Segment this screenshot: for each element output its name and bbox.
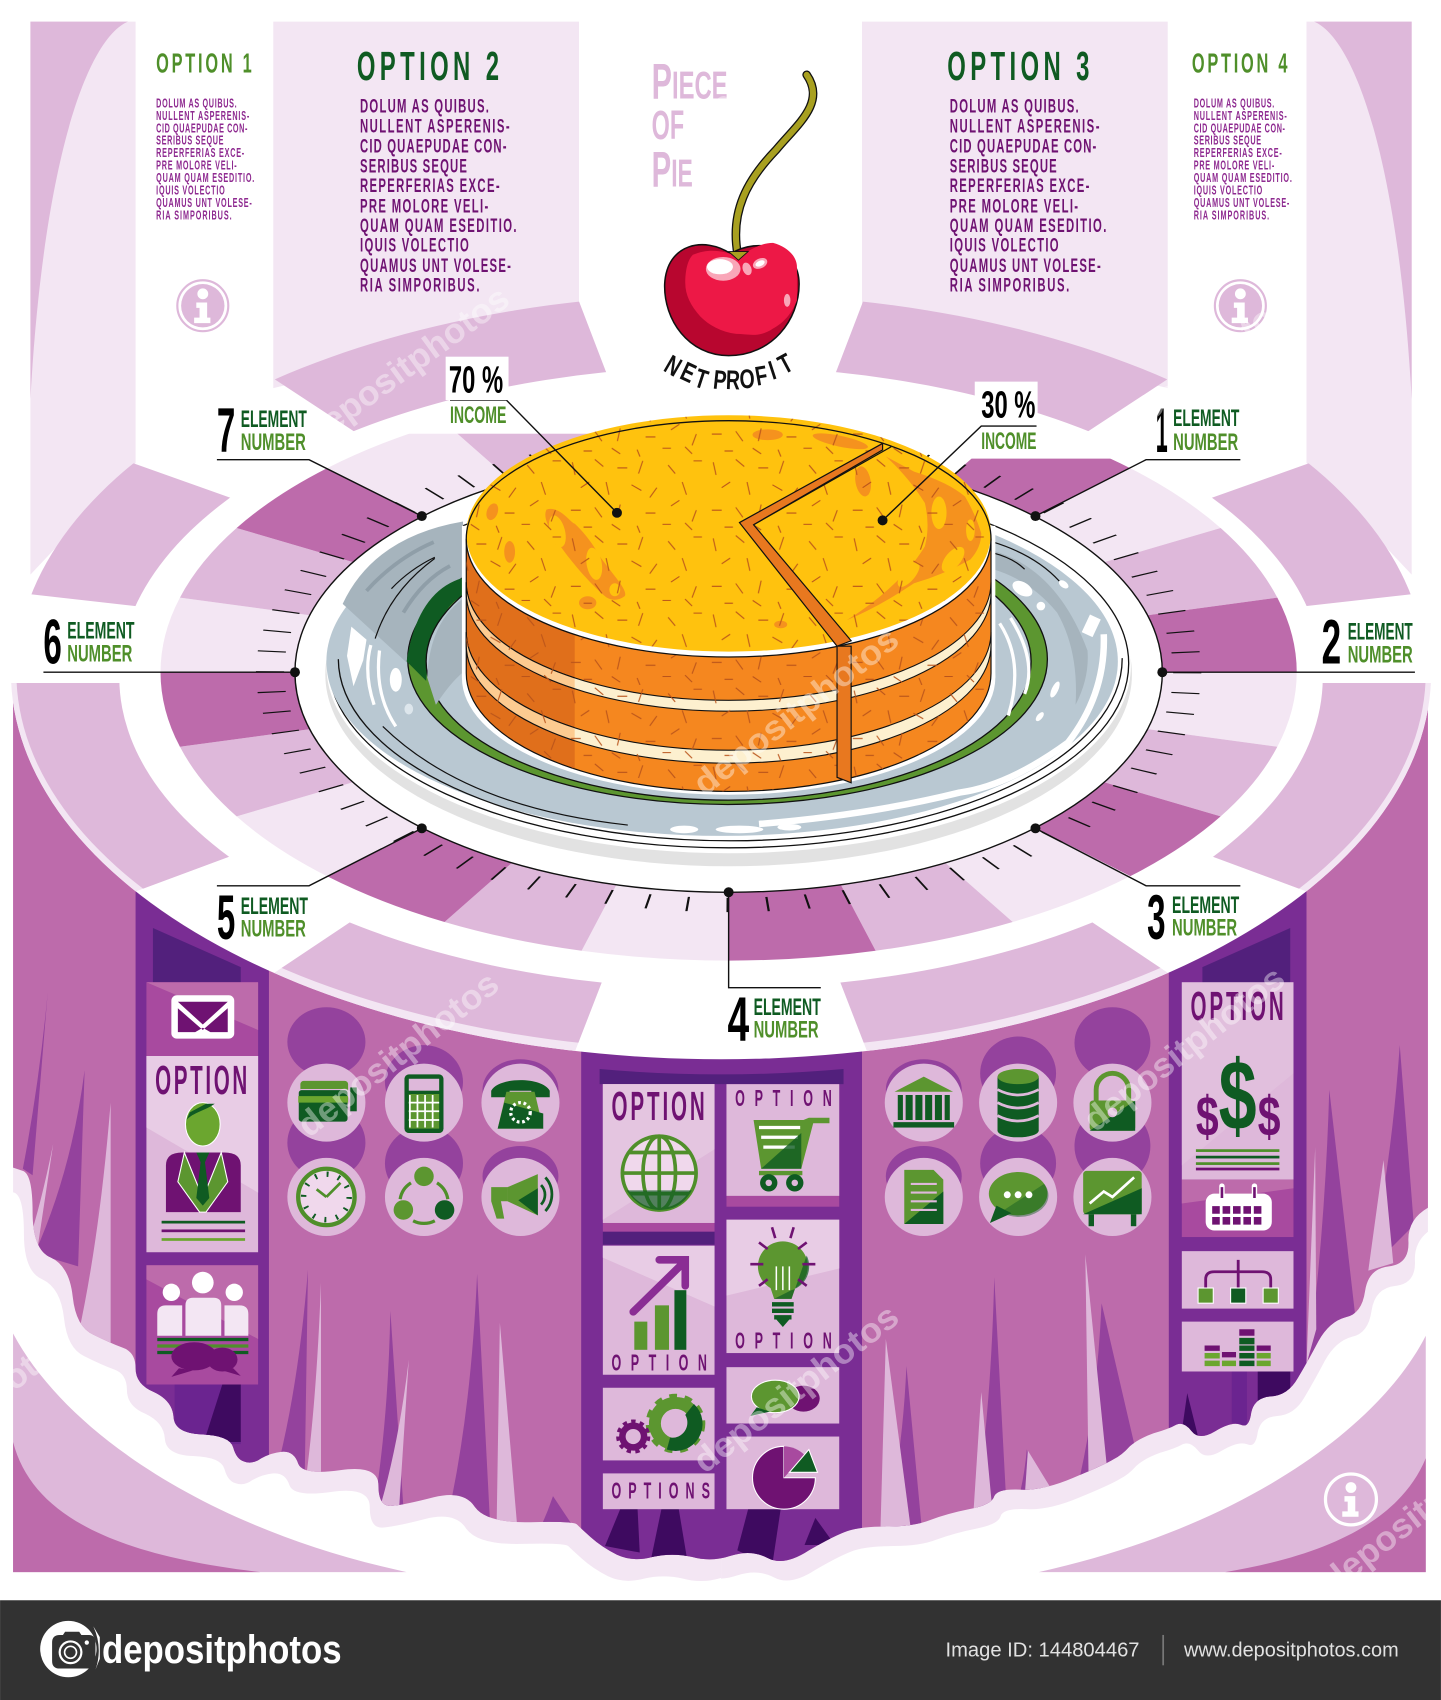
footer url: www.depositphotos.com	[1183, 1640, 1399, 1662]
icon: speech bubble	[989, 1172, 1048, 1223]
option 4 text block: CID QUAEPUDAE CON-	[1194, 122, 1285, 136]
icon: document	[904, 1170, 943, 1224]
centre dark column	[581, 1052, 862, 1561]
label 7 element number: ELEMENT	[241, 406, 307, 433]
label 1 element number: 1	[1156, 396, 1168, 466]
footer bar	[0, 1600, 1441, 1700]
option 2 text block: QUAM QUAM ESEDITIO.	[360, 216, 517, 237]
bottom-right corner shape	[1039, 1336, 1426, 1572]
option 4 text block: PRE MOLORE VELI-	[1194, 160, 1274, 173]
option 4 text block: QUAMUS UNT VOLESE-	[1194, 197, 1289, 211]
option 4 text block: OPTION 4	[1192, 47, 1288, 79]
circle shadows left	[287, 1007, 558, 1207]
icon: info left	[177, 280, 228, 331]
plate green ring	[408, 514, 1047, 804]
option 2 text block: NULLENT ASPERENIS-	[360, 116, 510, 137]
card: calendar	[1182, 1180, 1293, 1237]
title	[652, 54, 728, 197]
plate highlights	[670, 578, 1101, 833]
card: option person	[146, 1056, 258, 1252]
option 1 text block: QUAM QUAM ESEDITIO.	[156, 172, 254, 186]
slice cut	[739, 443, 891, 783]
label 70 percent income	[446, 357, 509, 429]
option 1 text block: SERIBUS SEQUE	[156, 135, 224, 148]
label 30 percent income	[975, 382, 1038, 455]
stock watermarks: depositphotos	[297, 279, 517, 453]
label 30 percent income: 30 %	[981, 384, 1035, 426]
option 2 text block: REPERFERIAS EXCE-	[360, 176, 500, 197]
label 1 element number: NUMBER	[1173, 429, 1238, 456]
stock watermarks: depositphotos	[291, 965, 506, 1145]
net profit label: T	[691, 364, 712, 396]
cake white rim	[462, 526, 995, 678]
label 1 element number: ELEMENT	[1173, 405, 1240, 432]
option 3 text block: SERIBUS SEQUE	[950, 156, 1057, 177]
option 3 text block: OPTION 3	[947, 45, 1089, 90]
option 3 text block: QUAMUS UNT VOLESE-	[950, 256, 1101, 277]
centre column cards	[603, 1083, 839, 1509]
option 4 text block: SERIBUS SEQUE	[1194, 135, 1261, 148]
label 3 element number: NUMBER	[1172, 915, 1237, 942]
option 3 panel background	[862, 22, 1168, 388]
option 1 text block: REPERFERIAS EXCE-	[156, 147, 244, 161]
curtain shadow	[13, 1168, 1428, 1581]
icon: megaphone	[491, 1174, 552, 1219]
plate rim white ellipse	[295, 452, 1162, 892]
stock watermarks: depositphotos	[686, 1297, 906, 1481]
label 3 element number	[1147, 883, 1240, 953]
label 70 percent income: 70 %	[449, 359, 503, 401]
card: light bulb option	[726, 1220, 839, 1354]
card: pie chart	[726, 1437, 839, 1509]
net profit label: R	[725, 366, 740, 396]
card: shopping cart option: OPTION	[735, 1085, 832, 1111]
net profit label: T	[774, 349, 799, 381]
cake top outline	[466, 421, 991, 657]
net profit label: P	[712, 366, 728, 397]
icon: coins	[998, 1069, 1039, 1137]
option 1 text block: RIA SIMPORIBUS.	[156, 210, 232, 223]
circles left	[287, 1064, 559, 1236]
option 3 text block: PRE MOLORE VELI-	[950, 197, 1078, 217]
option 1 text block: PRE MOLORE VELI-	[156, 160, 237, 173]
curtain folds	[23, 992, 1414, 1531]
card: chat	[726, 1367, 839, 1424]
top-right pale panel	[1307, 22, 1412, 575]
label 2 element number	[1322, 608, 1413, 678]
label 6 element number: ELEMENT	[67, 618, 135, 645]
cake	[466, 415, 991, 791]
card: option dollars: $	[1196, 1085, 1219, 1148]
label 6 element number: NUMBER	[67, 640, 132, 667]
outer white ellipse	[11, 285, 1431, 1059]
card: growth arrow option: OPTION	[612, 1349, 707, 1375]
plate	[325, 478, 1132, 866]
title: PIECE	[652, 54, 728, 110]
icon: calculator	[404, 1074, 443, 1133]
card: globe option	[603, 1083, 715, 1232]
option 1 text block: OPTION 1	[156, 47, 252, 79]
option 4 text block: QUAM QUAM ESEDITIO.	[1194, 172, 1292, 186]
cake tiers	[466, 539, 991, 791]
option 2 text block: RIA SIMPORIBUS.	[360, 276, 479, 297]
white gap ellipse	[119, 366, 1323, 989]
scale ticks	[270, 439, 1187, 905]
icon: telephone	[491, 1080, 550, 1129]
callout lines and dots	[43, 400, 1415, 988]
label 5 element number: 5	[217, 883, 235, 953]
net profit label: E	[676, 357, 700, 390]
option 3 text block: IQUIS VOLECTIO	[950, 236, 1059, 256]
icon: clock	[298, 1169, 355, 1225]
label 4 element number	[728, 985, 821, 1055]
option 1 text block: CID QUAEPUDAE CON-	[156, 122, 247, 136]
card: gears	[603, 1388, 715, 1460]
option 1 text block: QUAMUS UNT VOLESE-	[156, 197, 252, 211]
card: hierarchy	[1182, 1251, 1293, 1309]
label 6 element number	[43, 608, 135, 678]
outer ring segments	[16, 302, 1426, 1043]
option 3 text block: NULLENT ASPERENIS-	[950, 116, 1099, 137]
option 2 panel background	[273, 22, 579, 388]
option 3 text block: CID QUAEPUDAE CON-	[950, 136, 1096, 157]
option 2 text block: CID QUAEPUDAE CON-	[360, 136, 507, 157]
label 7 element number: NUMBER	[241, 429, 306, 456]
option 4 text block: REPERFERIAS EXCE-	[1194, 147, 1282, 161]
icon: bank	[893, 1077, 954, 1128]
card: envelope	[146, 982, 258, 1056]
label 5 element number	[217, 883, 308, 953]
right dark column	[1168, 892, 1306, 1436]
card: option dollars	[1182, 982, 1293, 1180]
label 6 element number: 6	[43, 608, 62, 678]
label 3 element number: 3	[1147, 883, 1166, 953]
option 2 text block: SERIBUS SEQUE	[360, 156, 467, 177]
net profit label: I	[765, 356, 780, 386]
icon: info bottom right	[1325, 1474, 1376, 1525]
left column cards	[146, 982, 258, 1385]
title: PIE	[652, 141, 693, 197]
label 7 element number	[217, 396, 307, 466]
icon: depositphotos camera logo	[40, 1621, 100, 1677]
option 2 text block: QUAMUS UNT VOLESE-	[360, 256, 511, 277]
option 3 text block: QUAM QUAM ESEDITIO.	[950, 216, 1106, 237]
label 30 percent income: INCOME	[981, 428, 1037, 455]
icon: chart board	[1083, 1171, 1142, 1226]
cherry	[665, 75, 813, 356]
icon circles right group	[885, 1007, 1151, 1236]
card: team	[146, 1265, 258, 1385]
net profit label	[659, 349, 799, 397]
icon: credit cards	[298, 1081, 357, 1122]
circles right	[885, 1064, 1151, 1236]
left dark column	[136, 892, 269, 1463]
label 4 element number: 4	[728, 985, 749, 1055]
card: option dollars: $	[1219, 1041, 1257, 1152]
card: growth arrow option	[603, 1246, 715, 1375]
cake top blobs	[484, 429, 981, 628]
card: light bulb option: OPTION	[735, 1328, 832, 1354]
option 2 text block: DOLUM AS QUIBUS.	[360, 97, 489, 118]
label 3 element number: ELEMENT	[1172, 892, 1240, 919]
icon: info right	[1215, 280, 1266, 331]
label 1 element number	[1156, 396, 1240, 466]
footer brand: depositphotos	[102, 1628, 342, 1672]
label 4 element number: NUMBER	[754, 1017, 819, 1044]
option 1 text block: IQUIS VOLECTIO	[156, 185, 225, 198]
option 3 text block	[947, 45, 1106, 297]
option 3 text block: RIA SIMPORIBUS.	[950, 276, 1069, 297]
stock watermarks: depositphotos	[1082, 287, 1298, 467]
label 2 element number: 2	[1322, 608, 1341, 678]
option 1 text block: NULLENT ASPERENIS-	[156, 110, 249, 123]
option 4 text block: RIA SIMPORIBUS.	[1194, 210, 1269, 223]
option 3 text block: DOLUM AS QUIBUS.	[950, 97, 1079, 118]
stock watermarks: depositphotos	[686, 620, 906, 803]
label 4 element number: ELEMENT	[754, 994, 821, 1021]
option 4 text block: NULLENT ASPERENIS-	[1194, 110, 1287, 123]
middle ring segments	[161, 394, 1297, 961]
option 2 text block	[357, 45, 517, 297]
option 2 text block: IQUIS VOLECTIO	[360, 236, 469, 256]
label 5 element number: ELEMENT	[241, 893, 308, 920]
right column cards	[1182, 982, 1293, 1371]
option 3 text block: REPERFERIAS EXCE-	[950, 176, 1089, 197]
bottom-left corner shape	[13, 1334, 407, 1572]
icon: network cycle	[394, 1167, 454, 1223]
option 1 text block	[156, 47, 254, 223]
net profit label: O	[739, 365, 756, 395]
label 7 element number: 7	[217, 396, 235, 466]
outer ring lower pale edge	[11, 683, 1431, 1051]
icon: padlock	[1090, 1073, 1135, 1131]
option 1 text block: DOLUM AS QUIBUS.	[156, 98, 237, 111]
option 4 text block: DOLUM AS QUIBUS.	[1194, 98, 1274, 111]
card: options label: OPTIONS	[612, 1477, 710, 1503]
stock watermarks: depositphotos	[1077, 959, 1292, 1139]
net profit label: F	[753, 361, 770, 393]
circle shadows right	[886, 1007, 1150, 1207]
option 4 text block: IQUIS VOLECTIO	[1194, 185, 1262, 198]
card: option dollars: OPTION	[1190, 984, 1284, 1029]
card: options label	[603, 1473, 715, 1509]
title: OF	[652, 102, 684, 148]
net profit label: N	[659, 350, 686, 383]
option 2 text block: PRE MOLORE VELI-	[360, 197, 488, 217]
tablecloth curtain	[13, 683, 1428, 1626]
cake top speckles	[466, 415, 991, 652]
label 70 percent income: INCOME	[450, 402, 506, 429]
card: equalizer	[1182, 1322, 1293, 1371]
option 2 text block: OPTION 2	[357, 45, 499, 90]
label 5 element number: NUMBER	[241, 916, 306, 943]
card: shopping cart option	[726, 1084, 839, 1207]
footer image id: Image ID: 144804467	[945, 1640, 1140, 1662]
cake top surface	[466, 415, 991, 652]
card: globe option: OPTION	[612, 1083, 705, 1129]
option 4 text block	[1192, 47, 1292, 223]
top-left pale panel	[30, 22, 136, 575]
card: option dollars: $	[1258, 1085, 1280, 1148]
icon circles left group	[287, 1007, 559, 1236]
card: option person: OPTION	[155, 1057, 247, 1103]
